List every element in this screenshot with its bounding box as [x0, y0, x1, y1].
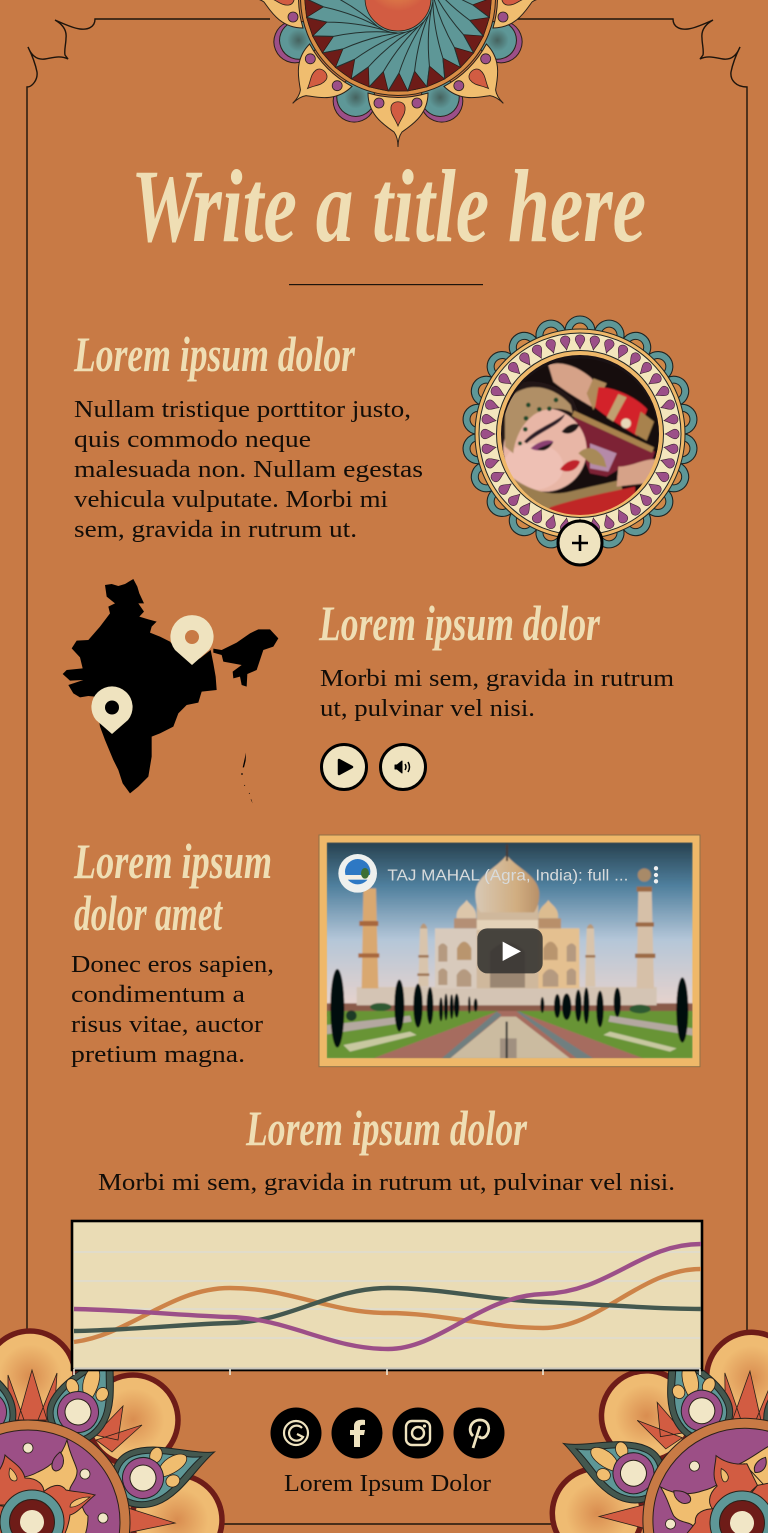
paragraph 2: Morbi mi sem, gravida in rutrum: [320, 666, 674, 692]
channel logo: [338, 854, 377, 893]
top mandala: [249, 0, 547, 147]
section 3: text: [71, 833, 274, 1068]
paragraph 2: [320, 666, 674, 722]
paragraph 1: sem, gravida in rutrum ut.: [74, 517, 357, 543]
heading 1: Lorem ipsum dolor: [73, 326, 355, 382]
heading 3: [73, 833, 272, 941]
icon: copyright spiral: [270, 1408, 322, 1458]
pin 2: [91, 686, 133, 734]
chart background: [72, 1221, 702, 1370]
green series: [74, 1288, 701, 1331]
Taj Mahal picture: [327, 842, 693, 1058]
paragraph 2: ut, pulvinar vel nisi.: [320, 696, 535, 722]
India map with pins: [63, 579, 278, 803]
section 1: text: [73, 326, 423, 543]
purple series: [74, 1244, 701, 1349]
heading 2: Lorem ipsum dolor: [318, 595, 600, 651]
heading 4: Lorem ipsum dolor: [245, 1100, 527, 1156]
footer text: Lorem Ipsum Dolor: [284, 1471, 491, 1497]
pin 1: [170, 615, 214, 665]
heading 3: dolor amet: [74, 885, 223, 941]
section 2: text and media buttons: [318, 595, 674, 790]
icon: facebook: [332, 1408, 382, 1458]
video frame: [319, 835, 700, 1067]
icon: pinterest: [454, 1408, 504, 1458]
paragraph 3: Donec eros sapien,: [71, 952, 274, 978]
paragraph 1: malesuada non. Nullam egestas: [74, 457, 423, 483]
bottom left mandala: [0, 1331, 225, 1533]
video menu dots: [654, 866, 658, 883]
paragraph 3: condimentum a: [71, 982, 245, 1008]
map shape: [63, 579, 278, 803]
mandala ring: [461, 316, 699, 552]
paragraph 1: Nullam tristique porttitor justo,: [74, 397, 411, 423]
sound button: [380, 744, 426, 790]
orange series: [74, 1269, 701, 1342]
bride photo: [502, 362, 658, 515]
paragraph 3: risus vitae, auctor: [71, 1012, 263, 1038]
title divider: [289, 284, 483, 285]
play overlay: [477, 928, 543, 973]
circular photo with mandala frame: [461, 316, 699, 565]
paragraph 1: [74, 397, 423, 543]
social icons: [270, 1408, 504, 1458]
play button: [322, 744, 366, 790]
section 4: heading and text: [98, 1100, 675, 1196]
paragraph 1: quis commodo neque: [74, 427, 311, 453]
video title: TAJ MAHAL (Agra, India): full ...: [387, 867, 628, 884]
heading 3: Lorem ipsum: [73, 833, 272, 889]
paragraph 4: Morbi mi sem, gravida in rutrum ut, pulvinar vel nisi.: [98, 1170, 675, 1196]
icon: instagram: [392, 1408, 444, 1458]
bottom right mandala: [542, 1322, 768, 1533]
add button: [558, 521, 602, 565]
paragraph 3: [71, 952, 274, 1068]
line chart: [72, 1221, 702, 1375]
paragraph 1: vehicula vulputate. Morbi mi: [74, 487, 388, 513]
paragraph 3: pretium magna.: [71, 1042, 245, 1068]
video thumbnail: [319, 835, 700, 1067]
